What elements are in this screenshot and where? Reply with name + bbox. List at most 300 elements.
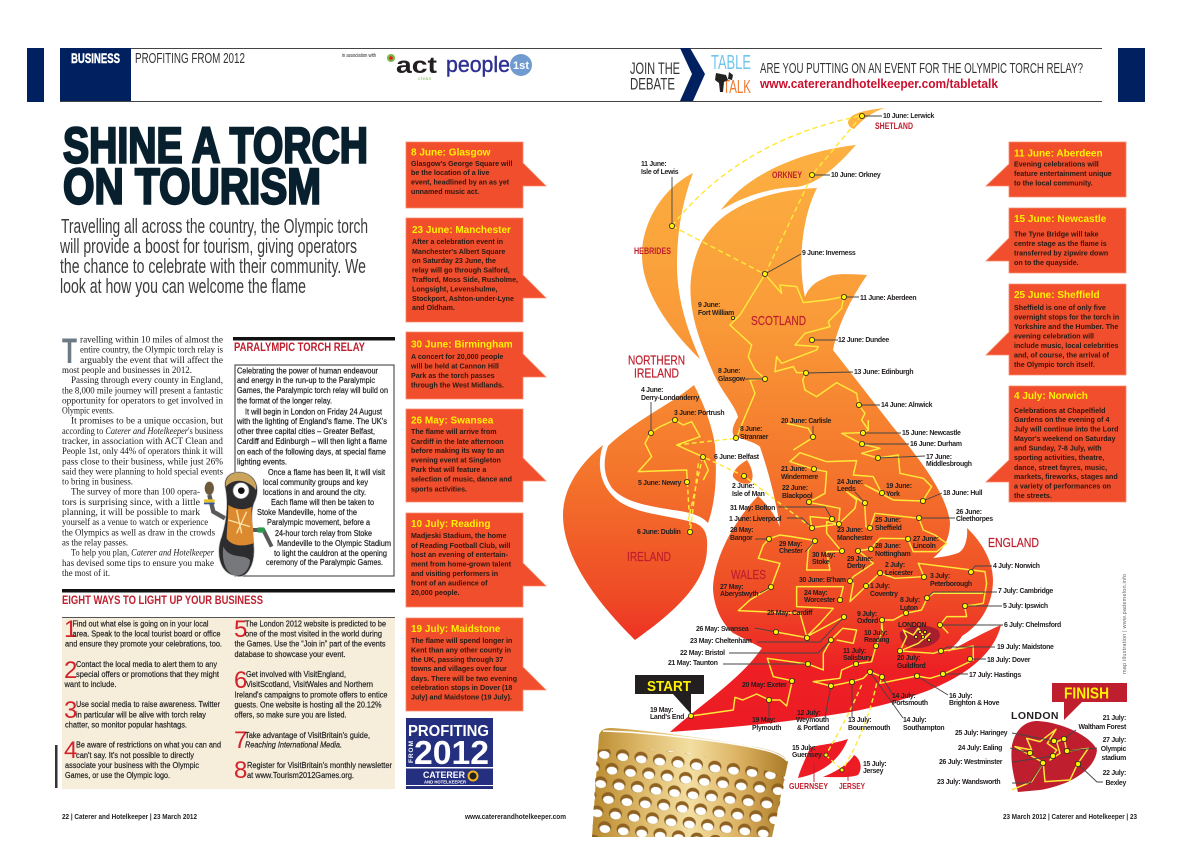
stop labels: Southampton: [903, 725, 944, 732]
callout: Sheffield: the Olympic torch itself.: [1014, 361, 1095, 369]
callout: Aberdeen: [986, 142, 1126, 197]
tips text: offers, so make sure you are listed.: [234, 710, 346, 720]
tips box: [62, 617, 395, 789]
tips text: the Games. Use the “Join in” part of the events: [234, 640, 386, 648]
stop labels: 3 July:: [930, 573, 950, 580]
tips text: Find out what else is going on in your local: [72, 620, 209, 628]
stop labels: Guildford: [897, 663, 926, 670]
paralympic text: [235, 365, 394, 576]
start flag: START: [647, 679, 691, 695]
callout: Swansea: [406, 409, 546, 502]
stop labels: 29 May:: [779, 541, 802, 548]
body article: the Olympics as well as draw in the crowds: [62, 527, 215, 537]
stop labels: 22 May: Bristol: [680, 650, 725, 657]
callout: Glasgow: 8 June: Glasgow: [411, 148, 491, 158]
stop labels: 11 July:: [843, 648, 866, 655]
stop labels: 27 July:: [1103, 737, 1126, 744]
callout: Swansea: Park that will feature a: [411, 466, 486, 474]
stop labels: stadium: [1102, 755, 1126, 762]
callout: Swansea: selection of music, dance and: [411, 476, 512, 484]
stop labels: 4 July: Norwich: [993, 563, 1040, 570]
stop labels: 6 July: Chelmsford: [1004, 622, 1061, 629]
callout: Maidstone: [406, 618, 546, 711]
callout: Manchester: and Oldham.: [412, 304, 455, 312]
heading: eight ways: EIGHT WAYS TO LIGHT UP YOUR BUSINESS: [62, 595, 263, 607]
callout: Manchester: Stockport, Ashton-under-Lyne: [412, 295, 514, 303]
London inset: [1011, 721, 1097, 792]
stop labels: 20 June: Carlisle: [781, 418, 831, 425]
standfirst: Travelling all across the country, the Olympic torch: [61, 215, 368, 238]
paralympic text: Stoke Mandeville, home of the: [257, 508, 358, 517]
stop labels: 14 July:: [903, 717, 926, 724]
callout: Norwich: Mayor's weekend on Saturday: [1014, 435, 1115, 443]
title: ON TOURISM: [63, 158, 321, 214]
route: London inset: [1012, 729, 1088, 790]
section tab: business: [60, 48, 131, 101]
callout: Birmingham: through the West Midlands.: [411, 382, 504, 390]
callout: Manchester: [406, 218, 546, 322]
Shetland: [848, 108, 885, 129]
body article: has devised some tips to ensure you make: [62, 558, 214, 568]
tip numbers: 3: [64, 697, 77, 724]
paralympic text: Games, the Paralympic torch relay will build on: [237, 386, 388, 395]
stop labels: Blackpool: [782, 493, 813, 500]
stop labels: Reading: [864, 637, 889, 644]
title: SHINE A TORCH: [63, 118, 368, 174]
Jersey: [823, 755, 861, 777]
body article: [62, 332, 223, 578]
Hebrides: [642, 173, 700, 359]
logo: profiting from 2012: CATERER: [423, 770, 465, 780]
stop labels: 1 July:: [870, 583, 890, 590]
standfirst: look at how you can welcome the flame: [60, 275, 306, 298]
body article: as the relay passes.: [62, 538, 128, 548]
body article: most people and businesses in 2012.: [62, 365, 192, 375]
callout: Reading: of Reading Football Club, will: [411, 542, 510, 550]
stop labels: 19 May:: [650, 707, 673, 714]
body article: yourself as a venue to watch or experience: [62, 517, 208, 527]
callout: Reading: and visiting performers in: [411, 570, 498, 578]
callout: Manchester: Manchester's Albert Square: [412, 248, 505, 256]
Great Britain: [670, 188, 1001, 732]
callout: Manchester: Longsight, Levenshulme,: [412, 286, 498, 294]
leader lines: [651, 116, 1103, 783]
panel: paralympic torch relay: [233, 337, 395, 576]
region names: SCOTLAND: [751, 313, 806, 328]
stop labels: 15 July:: [863, 761, 886, 768]
paralympic text: It will begin in London on Friday 24 August: [245, 408, 383, 416]
stop labels: Sheffield: [875, 525, 902, 532]
stop labels: 21 May: Taunton: [668, 660, 718, 667]
stop labels: Peterborough: [930, 581, 972, 588]
callout: Sheffield: and, of course, the arrival of: [1014, 352, 1110, 360]
stop labels: Plymouth: [752, 725, 781, 732]
callout: Maidstone: days. There will be two evening: [411, 675, 517, 683]
stop labels: 22 July:: [1103, 770, 1126, 777]
tip numbers: 2: [64, 657, 77, 684]
callout: Newcastle: centre stage as the flame is: [1014, 240, 1107, 248]
stop labels: Weymouth: [796, 717, 829, 724]
callout: Reading: [406, 513, 546, 607]
stop labels: 27 May:: [720, 584, 743, 591]
folio left: 22 | Caterer and Hotelkeeper | 23 March 2012: [62, 812, 197, 821]
callout: Sheffield: 25 June: Sheffield: [1014, 290, 1100, 301]
tips text: special offers or promotions that they might: [76, 670, 220, 679]
callout: Sheffield: overnight stops for the torch in: [1014, 314, 1119, 322]
callout: Maidstone: The flame will spend longer in: [411, 637, 512, 645]
body article: To help you plan, Caterer and Hotelkeeper: [71, 548, 214, 558]
region names: WALES: [731, 567, 766, 582]
logo: act clean: [387, 52, 437, 81]
logo: profiting from 2012: FROM: [408, 741, 415, 763]
stop labels: Luton: [900, 605, 918, 612]
logo: profiting from 2012: AND HOTELKEEPER: [424, 780, 467, 784]
paralympic text: ceremony of the Paralympic Games.: [266, 558, 383, 567]
stop labels: Nottingham: [875, 551, 911, 558]
body article: tracker, in association with ACT Clean and: [62, 436, 223, 446]
start flag: [635, 675, 704, 714]
stop labels: Glasgow: [718, 376, 746, 383]
stop labels: Manchester: [837, 535, 873, 542]
folio right: 23 March 2012 | Caterer and Hotelkeeper | 23: [1003, 812, 1137, 821]
stop labels: 27 June:: [913, 536, 939, 543]
stop labels: Derby: [847, 563, 866, 570]
callout: Manchester: Trafford, Moss Side, Rusholme,: [412, 276, 518, 284]
tips text: at www.Tourism2012Games.org.: [247, 771, 354, 780]
torch cauldron: [592, 728, 788, 837]
stop labels: 1 June: Liverpool: [729, 516, 782, 523]
logo: profiting from 2012: PROFITING: [408, 723, 489, 740]
tip numbers: 6: [234, 667, 247, 694]
stop labels: LONDON: [898, 622, 926, 629]
stop labels: Derry-Londonderry: [641, 395, 699, 402]
tips text: chatter, so monitor popular hashtags.: [65, 720, 187, 730]
callout: Birmingham: A concert for 20,000 people: [411, 353, 503, 361]
paralympic text: other three capital cities – Greater Belfast,: [237, 427, 375, 436]
logo: act clean: act: [396, 52, 437, 78]
callout: Reading: host an evening of entertain-: [411, 551, 509, 559]
callout: Birmingham: [406, 332, 546, 399]
stop labels: 10 July:: [864, 630, 887, 637]
stop labels: 13 June: Edinburgh: [854, 369, 913, 376]
region names: SHETLAND: [875, 121, 913, 131]
stop labels: 20 July:: [897, 655, 920, 662]
paralympic text: Each flame will then be taken to: [271, 498, 375, 507]
stop labels: 11 June: Aberdeen: [860, 295, 916, 302]
callout: Norwich: July will continue into the Lord: [1014, 426, 1118, 434]
tips text: Get involved with VisitEngland,: [246, 670, 346, 679]
body article: Olympic events.: [62, 406, 114, 416]
Ireland: [563, 445, 707, 640]
panel: eight ways: [62, 589, 395, 789]
paralympic text: and energy in the run-up to the Paralympic: [237, 376, 375, 385]
region names: JERSEY: [839, 781, 865, 791]
stop labels: 5 June: Newry: [638, 480, 682, 487]
stop labels: 10 June: Orkney: [831, 172, 881, 179]
stop labels: 26 May: Swansea: [696, 626, 749, 633]
stop labels: 3 June: Portrush: [674, 410, 724, 417]
Isle of Man: [733, 460, 753, 484]
London zone: [900, 626, 940, 648]
stop labels: 30 June: B'ham: [799, 577, 846, 584]
stop labels: 8 June:: [740, 426, 762, 433]
logo: profiting from 2012: 2012: [414, 734, 489, 771]
stop labels: 26 July: Westminster: [939, 759, 1003, 766]
tip numbers: 7: [234, 727, 247, 754]
callout: Birmingham: 30 June: Birmingham: [411, 340, 513, 350]
debate url: www.catererandhotelkeeper.com/tabletalk: [759, 77, 998, 91]
stop labels: 31 May: Bolton: [730, 505, 775, 512]
tips text: [64, 620, 392, 780]
paralympic text: Mandeville to the Olympic Stadium: [277, 539, 391, 548]
logo: people 1st: people: [446, 52, 510, 77]
website footer: www.catererandhotelkeeper.com: [464, 812, 566, 821]
stop labels: 23 June:: [837, 527, 863, 534]
body article: opportunity for operators to get involved in: [62, 395, 223, 405]
tips text: Be aware of restrictions on what you can and: [76, 740, 221, 750]
stop labels: Guernsey: [792, 752, 822, 759]
stop labels: 19 May:: [752, 717, 775, 724]
callout: Maidstone: the UK, passing through 37: [411, 656, 503, 664]
callout: Newcastle: The Tyne Bridge will take: [1014, 230, 1099, 238]
body article: The survey of more than 100 opera-: [71, 487, 200, 497]
tip numbers: 8: [234, 757, 247, 784]
tips text: Contact the local media to alert them to any: [76, 660, 217, 669]
tips text: database to showcase your event.: [234, 650, 346, 659]
body article: arguably the event that will affect the: [80, 355, 223, 365]
callout: Maidstone: July) and Maidstone (19 July).: [411, 694, 512, 702]
stop labels: Cleethorpes: [956, 516, 993, 523]
stop labels: 14 June: Alnwick: [881, 402, 933, 409]
stop labels: 18 June: Hull: [943, 490, 983, 497]
callout: Glasgow: [406, 142, 546, 208]
standfirst: the chance to celebrate with their community. We: [60, 255, 366, 278]
join the debate: DEBATE: [630, 76, 675, 94]
tips text: associate your business with the Olympic: [65, 761, 199, 770]
stop labels: 28 May:: [730, 527, 753, 534]
tips text: and ensure they promote your celebrations, too.: [65, 640, 222, 648]
callout: Sheffield: Sheffield is one of only five: [1014, 304, 1106, 312]
stop labels: Fort William: [698, 310, 734, 317]
logo: table talk: TALK: [723, 77, 751, 97]
stop labels: Stoke: [812, 559, 830, 566]
body article: It promises to be a unique occasion, but: [71, 416, 223, 426]
paralympic text: on each of the following days, at special flame: [237, 448, 386, 456]
region names: HEBRIDES: [634, 246, 671, 256]
paralympic text: Once a flame has been lit, it will visit: [268, 468, 386, 477]
body article: pass close to their business, while just 26%: [62, 456, 223, 466]
stop labels: Isle of Man: [732, 491, 765, 498]
stop labels: 17 June:: [926, 454, 952, 461]
stop labels: 28 June:: [875, 543, 901, 550]
callout: Norwich: dance, street fayres, music,: [1014, 464, 1107, 472]
stop labels: 23 July: Wandsworth: [937, 779, 1000, 786]
standfirst: will provide a boost for tourism, giving operators: [59, 235, 357, 258]
stop labels: & Portland: [797, 725, 829, 732]
section tab: business: BUSINESS: [71, 50, 120, 66]
paralympic text: Paralympic movement, before a: [267, 518, 371, 527]
stop labels: 15 June: Newcastle: [902, 430, 961, 437]
arrow chevron: [680, 48, 705, 101]
stop labels: Bexley: [1105, 780, 1126, 787]
stop labels: Oxford: [857, 618, 878, 625]
body article: according to Caterer and Hotelkeeper's business: [62, 426, 223, 436]
Guernsey: [798, 739, 848, 778]
callout: Aberdeen: to the local community.: [1014, 180, 1093, 188]
tip numbers: [64, 616, 247, 784]
stop labels: 8 July:: [900, 597, 920, 604]
stop labels: Coventry: [870, 591, 898, 598]
stop labels: 24 July: Ealing: [958, 745, 1002, 752]
paralympic text: the format of the longer relay.: [237, 396, 332, 406]
callout: Maidstone: celebration stops in Dover (18: [411, 684, 512, 692]
stop labels: 19 June:: [886, 483, 912, 490]
callout: Glasgow: event, headlined by an as yet: [411, 178, 510, 186]
paralympic text: lighting events.: [237, 458, 287, 466]
stop labels: Middlesbrough: [926, 461, 972, 468]
logo: table talk: [711, 52, 751, 97]
stop labels: Bangor: [730, 535, 753, 542]
stop labels: Stranraer: [740, 434, 769, 441]
region names: [627, 121, 1039, 791]
region names: ORKNEY: [772, 170, 802, 180]
callout: Reading: front of an audience of: [411, 580, 488, 588]
tip numbers: 1: [64, 616, 77, 643]
mascot: Wenlock: [204, 472, 272, 577]
region names: IRELAND: [634, 366, 679, 380]
stop labels: 9 June: Inverness: [802, 250, 856, 257]
region names: ENGLAND: [988, 535, 1039, 550]
callout: Norwich: markets, fireworks, stages and: [1014, 473, 1118, 481]
stop labels: Lincoln: [913, 543, 936, 550]
tips text: The London 2012 website is predicted to be: [245, 620, 387, 628]
stop labels: Olympic: [1101, 746, 1126, 753]
logo: profiting from 2012: [406, 718, 493, 789]
stop markers: [648, 113, 1081, 772]
finish flag: FINISH: [1064, 686, 1109, 702]
callout: Manchester: 23 June: Manchester: [412, 225, 511, 236]
body article: ravelling within 10 miles of almost the: [80, 334, 223, 344]
paralympic text: to light the cauldron at the opening: [274, 549, 387, 558]
callout: Birmingham: Park as the torch passes: [411, 372, 495, 380]
stop labels: 6 June: Belfast: [714, 454, 760, 461]
callout: Norwich: Gardens on the evening of 4: [1014, 416, 1109, 424]
tips text: Take advantage of VisitBritain's guide,: [245, 731, 370, 740]
callout: Sheffield: evening celebration will: [1014, 332, 1094, 340]
callout: Maidstone: towns and villages over four: [411, 665, 507, 673]
body article: entire country, the Olympic torch relay is: [80, 345, 223, 355]
stop labels: 26 June:: [956, 509, 982, 516]
paralympic text: locations in and around the city.: [263, 488, 366, 497]
stop labels: Leicester: [885, 570, 913, 577]
stop labels: York: [886, 491, 900, 498]
region names: NORTHERN: [628, 352, 685, 368]
stop labels: 12 July:: [797, 710, 820, 717]
stop labels: 11 June:: [641, 161, 666, 168]
callout: Swansea: 26 May: Swansea: [411, 416, 494, 426]
tips text: Games, or use the Olympic logo.: [65, 771, 170, 780]
logo: table talk: TABLE: [711, 52, 751, 74]
London inset heading: LONDON: [1011, 710, 1059, 722]
stop labels: Jersey: [863, 768, 884, 775]
callout: Manchester: After a celebration event in: [412, 238, 503, 246]
callout: Maidstone: 19 July: Maidstone: [411, 624, 501, 635]
tips text: guests. One website is hosting all the 20.12%: [234, 700, 382, 710]
callout: Norwich: and Sunday, 7-8 July, with: [1014, 444, 1102, 452]
join the debate: JOIN THE: [630, 60, 680, 78]
callout: Newcastle: on to the quayside.: [1014, 259, 1079, 267]
paralympic text: Cardiff and Edinburgh – will then light a flame: [237, 437, 388, 446]
callout: Glasgow: unnamed music act.: [411, 188, 479, 196]
stop labels: Chester: [779, 548, 803, 555]
header band: [27, 48, 1145, 102]
stop labels: Salisbury: [843, 655, 872, 662]
stop labels: 9 June:: [698, 302, 720, 309]
stop labels: 9 July:: [857, 611, 877, 618]
stop labels: 22 June:: [782, 485, 808, 492]
tips text: can't say. It's not possible to directly: [76, 751, 194, 760]
stop labels: Brighton & Hove: [949, 700, 1000, 707]
stop labels: 16 July:: [949, 693, 972, 700]
tips text: in particular will be alive with torch relay: [76, 710, 206, 720]
body article: tors is surprising since, with a little: [62, 497, 200, 507]
callout: Sheffield: [986, 284, 1126, 375]
route: south coast and Channel Islands: [691, 620, 973, 770]
stop labels: 2 July:: [885, 562, 905, 569]
body article: People 1st, only 44% of operators think it will: [62, 446, 223, 456]
section title: PROFITING FROM 2012: [135, 51, 245, 67]
stop labels: Aberystwyth: [720, 591, 758, 598]
stop labels: 23 May: Cheltenham: [690, 638, 752, 645]
stop labels: 19 July: Maidstone: [997, 644, 1054, 651]
stop labels: 6 June: Dublin: [637, 529, 681, 536]
stop labels: 25 May: Cardiff: [767, 610, 813, 617]
drop cap: T: [62, 332, 77, 371]
stop labels: [637, 113, 1127, 787]
callout: Glasgow: be the location of a live: [411, 169, 489, 177]
join the debate: [630, 60, 680, 94]
stop labels: Land's End: [650, 714, 684, 721]
stop labels: 24 May:: [804, 590, 827, 597]
callout: Aberdeen: feature entertainment unique: [1014, 170, 1112, 178]
callout: Norwich: [986, 386, 1126, 502]
body article: Passing through every county in England,: [71, 375, 223, 385]
callout: Reading: 10 July: Reading: [411, 519, 490, 530]
paralympic text: Celebrating the power of human endeavour: [237, 366, 378, 376]
stop labels: 15 July:: [792, 745, 815, 752]
stop labels: 5 July: Ipswich: [1003, 603, 1048, 610]
finish flag: [1052, 683, 1127, 720]
stop labels: 25 June:: [875, 517, 901, 524]
stop labels: Portsmouth: [892, 700, 928, 707]
callout: Manchester: relay will go through Salford,: [412, 266, 510, 274]
callout: Manchester: on Saturday 23 June, the: [412, 257, 496, 265]
callout: Aberdeen: 11 June: Aberdeen: [1014, 148, 1103, 160]
callout: Swansea: evening event at Singleton: [411, 456, 501, 464]
stop labels: 4 June:: [641, 387, 663, 394]
callout: Sheffield: Yorkshire and the Humber. The: [1014, 323, 1118, 331]
body article: said they were planning to hold special events: [62, 466, 223, 476]
stop labels: 16 June: Durham: [910, 441, 962, 448]
stop labels: Waltham Forest: [1078, 724, 1127, 731]
Northern Ireland: [605, 385, 716, 523]
paralympic text: local community groups and key: [263, 478, 368, 487]
tip numbers: 4: [64, 737, 77, 764]
stop labels: 21 July:: [1103, 715, 1126, 722]
stop labels: 21 June:: [781, 466, 807, 473]
stop labels: 20 May: Exeter: [742, 682, 787, 689]
callout: Swansea: before making its way to an: [411, 447, 504, 455]
